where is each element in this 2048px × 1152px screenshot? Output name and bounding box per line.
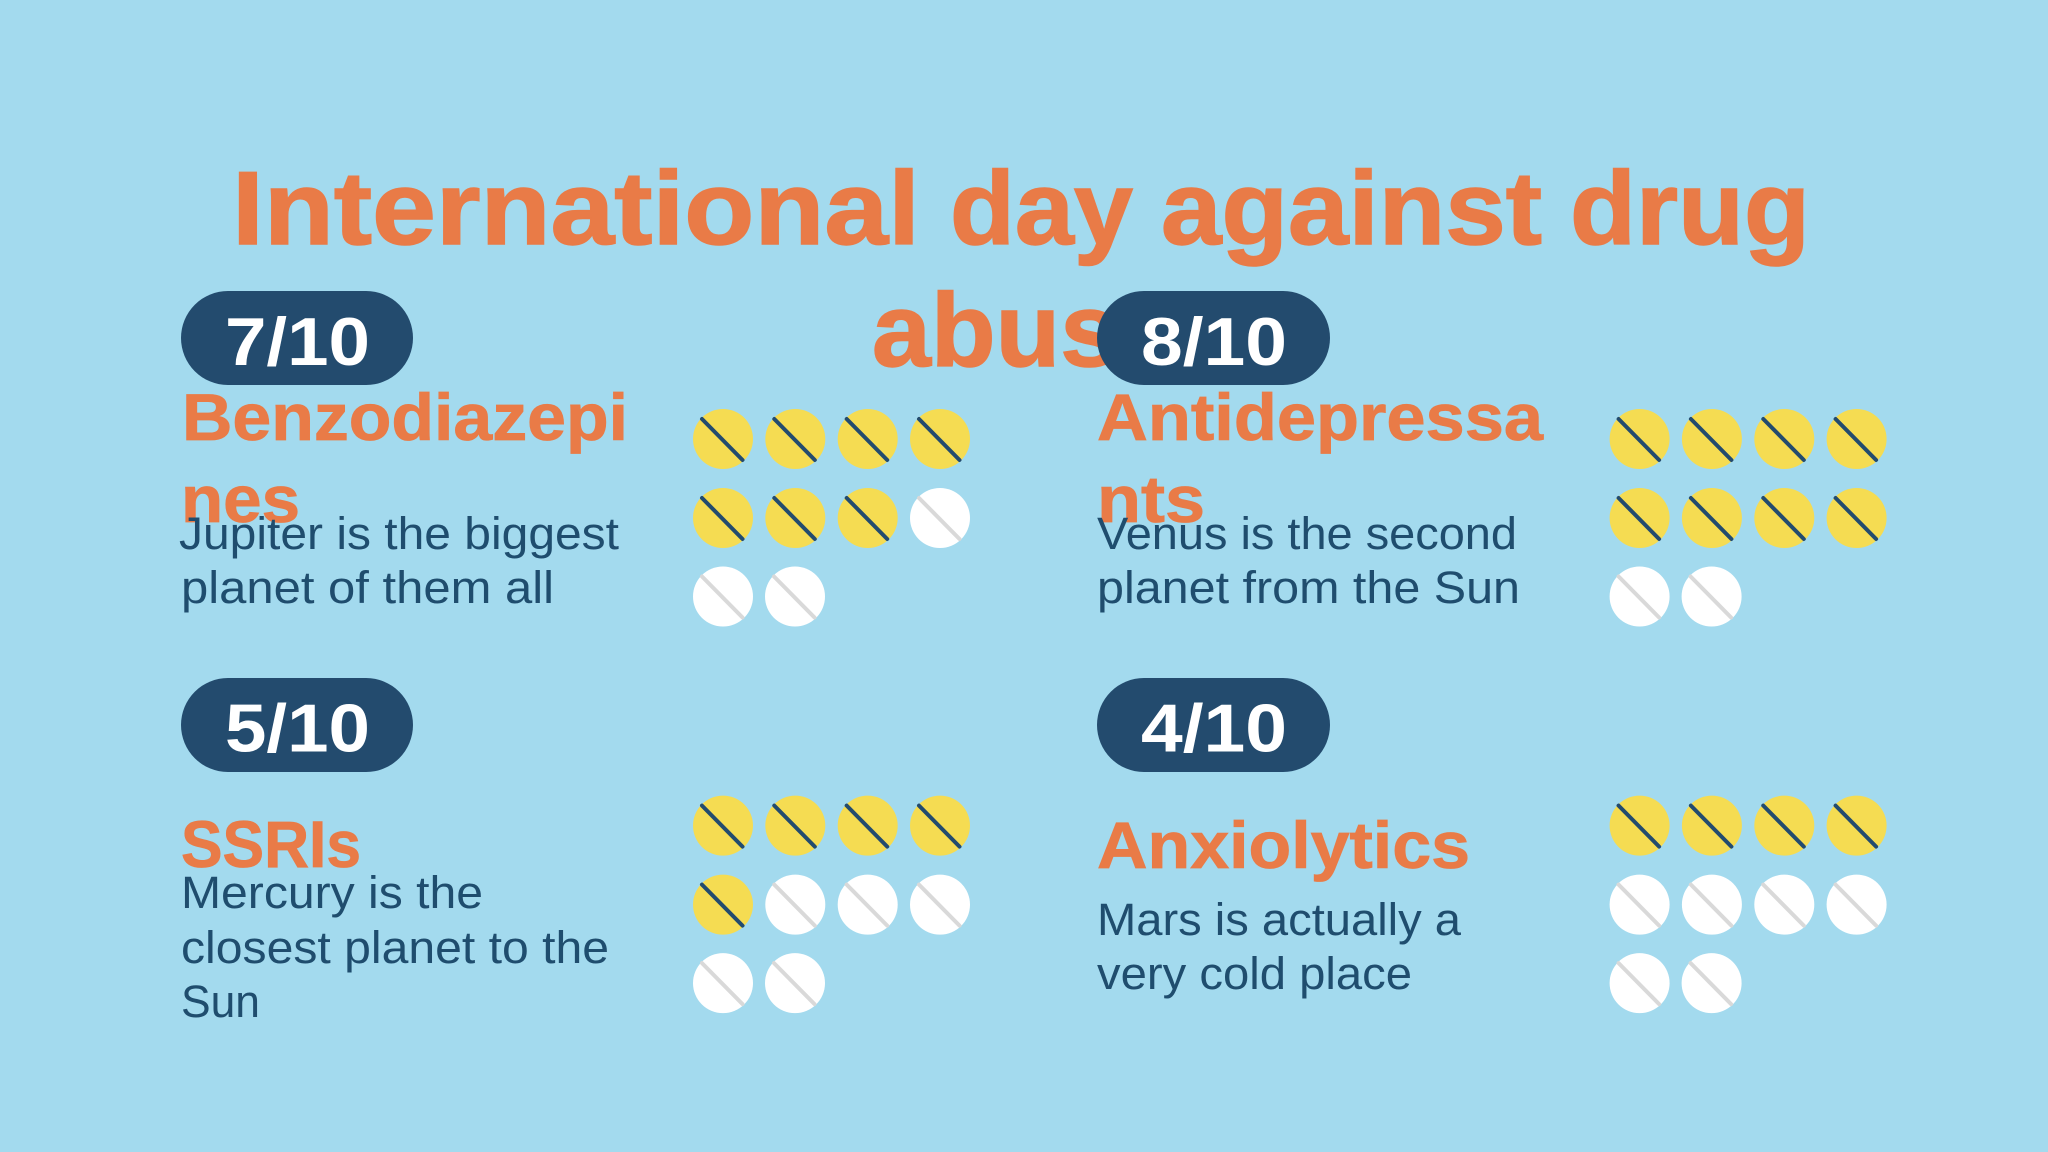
badge: 4/10 [1097,678,1330,772]
badge: 5/10 [181,678,413,772]
title: abuse [872,273,1178,389]
panel: antidepressants [1097,291,1887,626]
heading: Antidepressants [1097,380,1544,536]
text: Venus description: Venus is the second [1097,508,1517,559]
pill grid: 7 of 10 [693,409,970,626]
title [232,151,1810,389]
text: Mars description: Mars is actually a [1097,894,1462,945]
pill grid: 8 of 10 [1610,409,1887,626]
text: Venus description [1097,508,1520,613]
badge: 4/10: 4/10 [1141,691,1287,767]
heading: Antidepressants: Antidepressa [1097,380,1544,454]
text: Venus description: planet from the Sun [1097,562,1520,613]
text: Jupiter description: Jupiter is the biggest [179,508,620,559]
panel: SSRIs [181,678,970,1027]
text: Mercury description: closest planet to the [181,922,609,973]
heading: SSRIs: SSRIs [181,807,361,881]
badge: 7/10: 7/10 [225,304,370,380]
badge: 7/10 [181,291,413,385]
title: drug [1570,151,1810,267]
text: Mercury description [181,867,609,1027]
heading: Anxiolytics: Anxiolytics [1097,808,1470,882]
badge: 5/10: 5/10 [225,691,370,767]
title: International [232,151,920,267]
heading: Benzodiazepines [181,380,628,536]
title: against [1161,151,1542,267]
pill grid: 5 of 10 [693,796,970,1013]
text: Mercury description: Mercury is the [181,867,483,918]
panel: benzodiazepines [179,291,970,626]
text: Mars description: very cold place [1097,948,1412,999]
panel: anxiolytics [1097,678,1887,1013]
badge: 8/10: 8/10 [1141,304,1287,380]
title: day [950,151,1133,267]
badge: 8/10 [1097,291,1330,385]
heading: Antidepressants: nts [1097,462,1205,536]
text: Jupiter description: planet of them all [181,562,554,613]
text: Mercury description: Sun [181,976,260,1027]
pill grid: 4 of 10 [1610,796,1887,1013]
text: Mars description [1097,894,1462,999]
heading: Benzodiazepines: Benzodiazepi [182,380,628,454]
heading: Benzodiazepines: nes [181,462,300,536]
text: Jupiter description [179,508,620,613]
